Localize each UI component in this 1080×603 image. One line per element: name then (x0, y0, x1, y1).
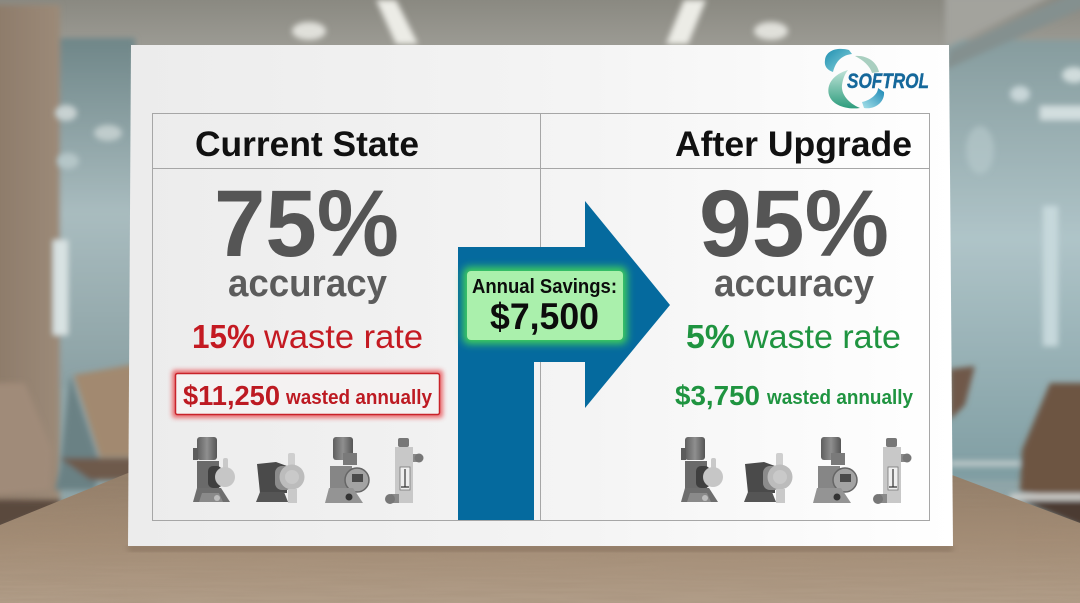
waste rate: 15% (192, 318, 255, 355)
waste rate (192, 318, 423, 355)
callout: annual savings (463, 267, 627, 344)
icon: pump 2 (256, 453, 304, 503)
panel: current state (172, 171, 443, 504)
icon: pump 2 (744, 453, 792, 503)
heading: current state: Current State (195, 125, 419, 164)
waste rate: waste rate (263, 318, 423, 355)
panel: after upgrade (675, 171, 914, 504)
waste rate: waste rate (743, 318, 901, 355)
icon: pump 3 (813, 437, 857, 503)
table (0, 470, 1080, 603)
callout: annual savings: Annual Savings: (472, 276, 617, 298)
chairs right (950, 366, 1080, 530)
board shadow (128, 546, 953, 551)
stat: 75%: 75% (214, 171, 399, 277)
icon: pump 1 (681, 437, 723, 502)
savings: wasted annually: $3,750 (675, 380, 760, 411)
label: accuracy: accuracy (714, 263, 874, 305)
savings: wasted annually (675, 380, 914, 411)
icon: pump 3 (325, 437, 369, 503)
label: accuracy: accuracy (228, 263, 387, 305)
stat: 95%: 95% (699, 171, 889, 277)
callout: annual savings: $7,500 (490, 296, 599, 337)
heading: after upgrade: After Upgrade (675, 125, 912, 164)
chairs left (0, 364, 135, 530)
logo wordmark: SOFTROL (847, 70, 929, 93)
arrow (458, 201, 670, 520)
logo: SOFTROL (825, 49, 929, 108)
icon: pump 4 (385, 438, 424, 504)
comparison frame (152, 113, 930, 520)
savings: wasted annually: wasted annually (766, 387, 914, 409)
callout: wasted annually: $11,250 (183, 380, 280, 411)
icon: pump 1 (193, 437, 235, 502)
board (128, 45, 953, 546)
callout: wasted annually: wasted annually (285, 387, 433, 409)
waste rate: 5% (686, 318, 735, 355)
callout: wasted annually (172, 370, 443, 418)
icon: pump 4 (873, 438, 912, 504)
